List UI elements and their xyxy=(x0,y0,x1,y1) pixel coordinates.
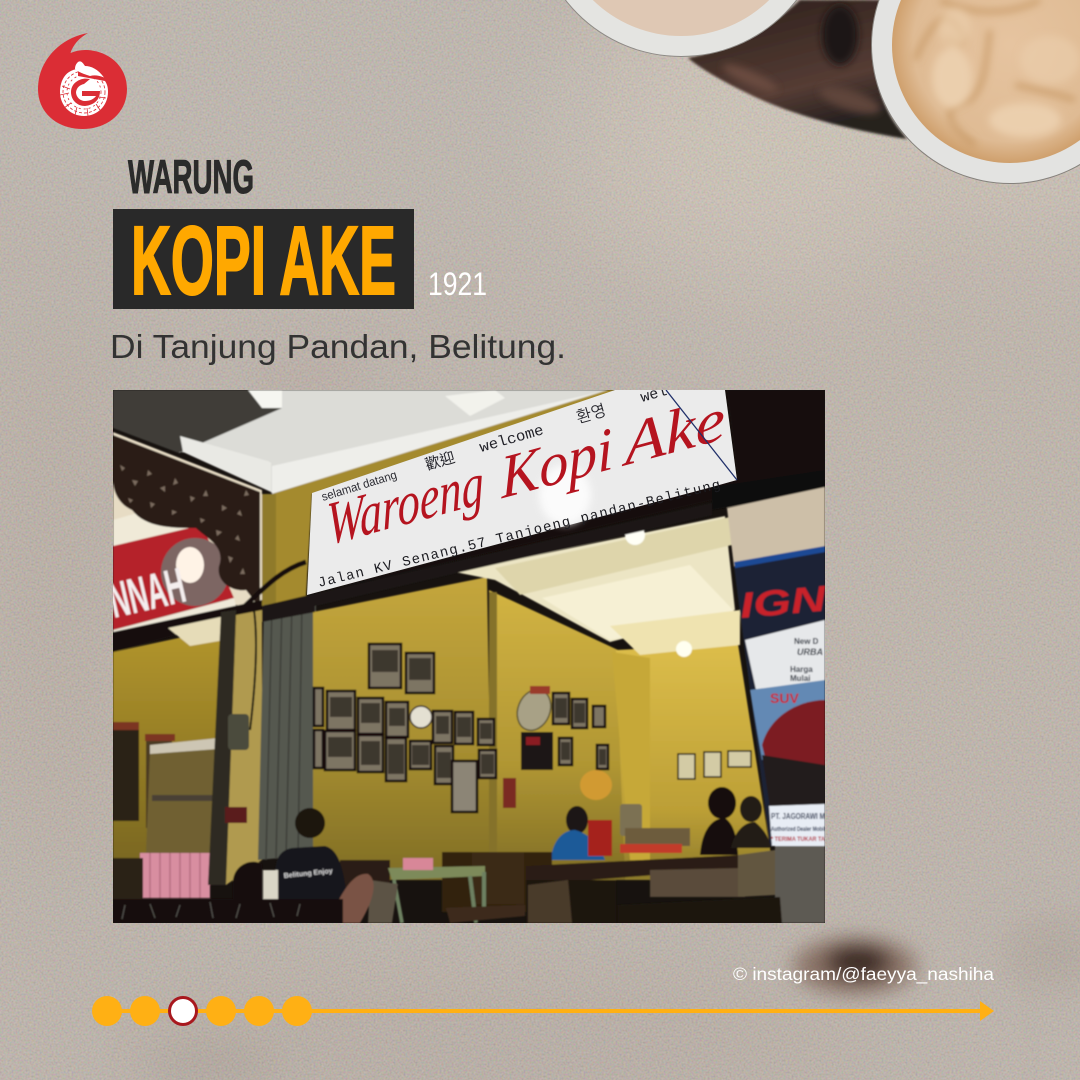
red banner xyxy=(104,525,236,636)
signboard: Kopi xyxy=(498,415,615,513)
urn and bottles xyxy=(620,804,690,853)
red banner: NNAH xyxy=(104,557,191,629)
credit: © instagram/@faeyya_nashiha xyxy=(733,964,994,985)
timeline arrow xyxy=(980,1001,994,1021)
year label: 1921 xyxy=(428,266,487,302)
right: stone wall and banner xyxy=(712,470,825,510)
photo: Waroeng Kopi Ake storefront: Authorized Dealer Mobil xyxy=(771,827,825,833)
photo: Waroeng Kopi Ake storefront: IGN xyxy=(738,578,829,626)
progress timeline xyxy=(92,996,994,1026)
logo: red speech-six emblem xyxy=(38,33,127,129)
seated man, blue shirt xyxy=(551,806,612,860)
signboard: Jalan KV Senang.57 Tanjoeng pandan-Belitung xyxy=(316,478,722,592)
seated man, black t-shirt xyxy=(113,808,374,923)
timeline steps xyxy=(92,996,312,1026)
signboard: wel xyxy=(639,383,669,407)
signboard: selamat datang xyxy=(320,468,398,504)
signboard: 환영 xyxy=(574,401,608,426)
photo: Waroeng Kopi Ake storefront: Mulai xyxy=(790,674,810,683)
heading: KOPI AKE box: KOPI AKE xyxy=(131,206,396,315)
signboard: Waroeng xyxy=(325,450,485,559)
wall clock xyxy=(410,706,432,728)
photo: Waroeng Kopi Ake storefront: SUV xyxy=(770,690,799,706)
wall photo frames xyxy=(314,644,608,812)
photo: Waroeng Kopi Ake storefront: * TERIMA TUKAR TA xyxy=(771,837,826,843)
silhouetted customers xyxy=(700,787,771,855)
heading: KOPI AKE box xyxy=(113,206,414,315)
signboard: Ake xyxy=(618,385,727,481)
furniture xyxy=(113,850,782,923)
certificates on far wall xyxy=(678,751,751,779)
logo: white ornamental ring with eagle head xyxy=(60,61,108,116)
photo: Waroeng Kopi Ake storefront xyxy=(104,383,829,923)
black beam xyxy=(274,470,824,604)
right cup with latte art xyxy=(871,0,1080,184)
seated man, black t-shirt: Belitung Enjoy xyxy=(283,868,333,880)
roller shutter xyxy=(258,598,316,860)
signboard: welcome xyxy=(478,422,546,457)
carved ornament xyxy=(113,435,260,608)
timeline line xyxy=(107,1009,982,1013)
signboard xyxy=(307,383,737,595)
photo: Waroeng Kopi Ake storefront: PT. JAGORAWI M xyxy=(771,812,825,821)
interior ceiling xyxy=(455,516,735,642)
left lower interior xyxy=(113,628,225,880)
signboard: 歡迎 xyxy=(423,446,457,475)
background: dark coffee stain xyxy=(793,938,917,994)
cup shadow xyxy=(688,0,907,139)
ochre fascia and column xyxy=(262,390,620,610)
heading: WARUNG: WARUNG xyxy=(128,150,254,203)
photo: Waroeng Kopi Ake storefront: Harga xyxy=(790,665,813,674)
hanging snacks xyxy=(580,770,612,800)
photo: Waroeng Kopi Ake storefront: New D xyxy=(794,637,819,646)
left ornament area xyxy=(113,432,262,610)
photo: Waroeng Kopi Ake storefront: URBA xyxy=(797,647,823,657)
back walls xyxy=(313,577,492,880)
left cup xyxy=(534,0,828,57)
coffee cups xyxy=(534,0,1080,184)
subtitle: Di Tanjung Pandan, Belitung. xyxy=(110,328,566,365)
ceilings xyxy=(113,390,282,453)
wall fan and machine xyxy=(503,685,557,808)
